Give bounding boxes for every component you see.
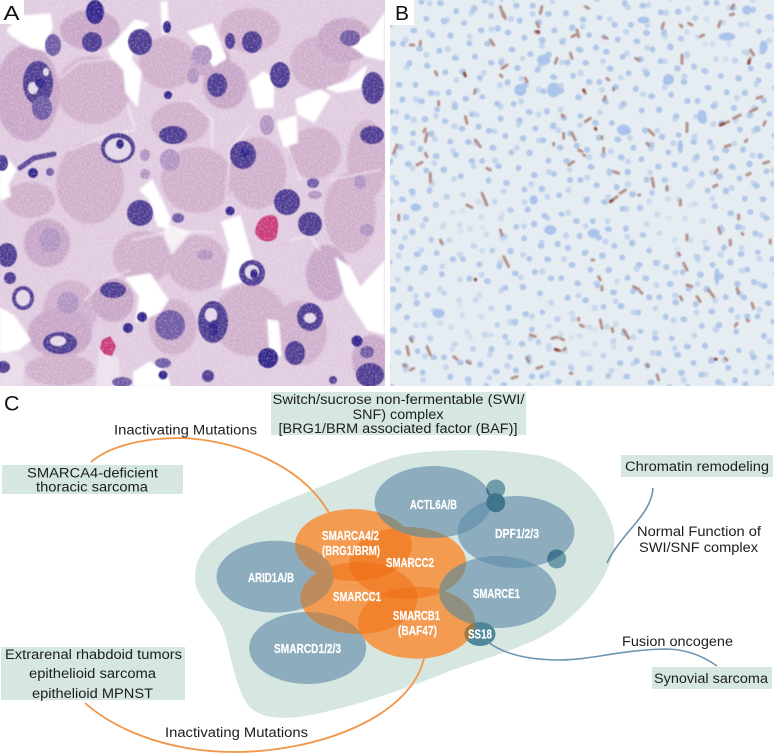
blue subunit ellipses xyxy=(216,466,574,684)
white gaps between cells xyxy=(0,2,384,386)
label box: extrarenal rhabdoid tumors: Extrarenal rhabdoid tumors xyxy=(5,647,182,662)
label box: synovial sarcoma: Synovial sarcoma xyxy=(654,671,769,686)
label: normal function: Normal Function of xyxy=(637,524,761,539)
subunit labels: (BRG1/BRM) xyxy=(322,543,380,558)
arrow: blue line to chromatin remodeling xyxy=(607,488,653,563)
subunit labels: SMARCA4/2 xyxy=(322,528,379,543)
overlap: blue with blue xyxy=(458,501,537,568)
panel label B: B xyxy=(395,3,409,25)
label box: SMARCA4-deficient thoracic sarcoma: SMARCA4-deficient xyxy=(27,466,158,480)
subunit labels: (BAF47) xyxy=(398,623,437,638)
red blood cells xyxy=(255,215,278,241)
label: inactivating mutations top: Inactivating Mutations xyxy=(114,422,257,438)
complex background blob xyxy=(195,450,615,718)
arrow: orange curve top, SMARCA4 inactivating xyxy=(91,438,329,513)
arrow: orange curve bottom, SMARCB1 inactivating xyxy=(85,653,425,752)
overlap: triple orange xyxy=(349,562,418,599)
subunit labels: SMARCC1 xyxy=(333,589,381,604)
heading: SWI/SNF complex xyxy=(271,392,526,436)
small teal domain circles xyxy=(486,480,566,568)
overlap: blue with orange, brown xyxy=(295,543,364,638)
subunit labels: SMARCE1 xyxy=(473,586,520,601)
subunit labels: SMARCD1/2/3 xyxy=(274,641,341,656)
cell nuclei xyxy=(0,0,384,387)
label box: extrarenal rhabdoid tumors: epithelioid MPNST xyxy=(32,686,153,701)
panel C: SWI/SNF complex diagram xyxy=(195,450,615,718)
panel label B xyxy=(390,0,414,25)
label: fusion oncogene: Fusion oncogene xyxy=(622,634,733,649)
label box: extrarenal rhabdoid tumors: epithelioid sarcoma xyxy=(29,666,157,681)
panel B: immunostain histology photo xyxy=(390,0,774,386)
subunit labels: DPF1/2/3 xyxy=(495,526,539,541)
subunit labels xyxy=(248,497,539,656)
label: normal function: SWI/SNF complex xyxy=(639,540,758,555)
label: inactivating mutations bottom: Inactivating Mutations xyxy=(165,725,308,740)
label: normal function xyxy=(637,524,761,555)
subunit labels: ARID1A/B xyxy=(248,570,294,585)
heading: SWI/SNF complex: Switch/sucrose non-fermentable (SWI/ xyxy=(272,392,525,407)
label box: synovial sarcoma xyxy=(652,667,772,689)
subunit labels: SMARCC2 xyxy=(386,555,434,570)
overlap: orange with orange xyxy=(331,528,440,634)
label box: SMARCA4-deficient thoracic sarcoma xyxy=(2,465,183,494)
label box: extrarenal rhabdoid tumors xyxy=(1,647,185,701)
subunit labels: ACTL6A/B xyxy=(410,497,457,512)
panel label A: A xyxy=(4,3,20,25)
heading: SWI/SNF complex: [BRG1/BRM associated factor (BAF)] xyxy=(278,421,518,436)
SS18 domain: SS18 xyxy=(468,626,492,642)
panel A: H&E histology photo xyxy=(0,0,392,387)
subunit labels: SMARCB1 xyxy=(393,608,440,623)
label box: SMARCA4-deficient thoracic sarcoma: thoracic sarcoma xyxy=(36,480,149,494)
arrow: blue line from SS18 to synovial sarcoma xyxy=(488,642,717,666)
label box: chromatin remodeling: Chromatin remodeling xyxy=(625,459,769,474)
panel label C: C xyxy=(4,392,20,416)
panel label A xyxy=(0,0,24,25)
label box: chromatin remodeling xyxy=(621,455,773,477)
orange subunit ellipses xyxy=(295,509,475,659)
SS18 domain xyxy=(464,622,496,646)
overlap: blue with orange, grey xyxy=(376,512,476,624)
heading: SWI/SNF complex: SNF) complex xyxy=(352,407,444,422)
